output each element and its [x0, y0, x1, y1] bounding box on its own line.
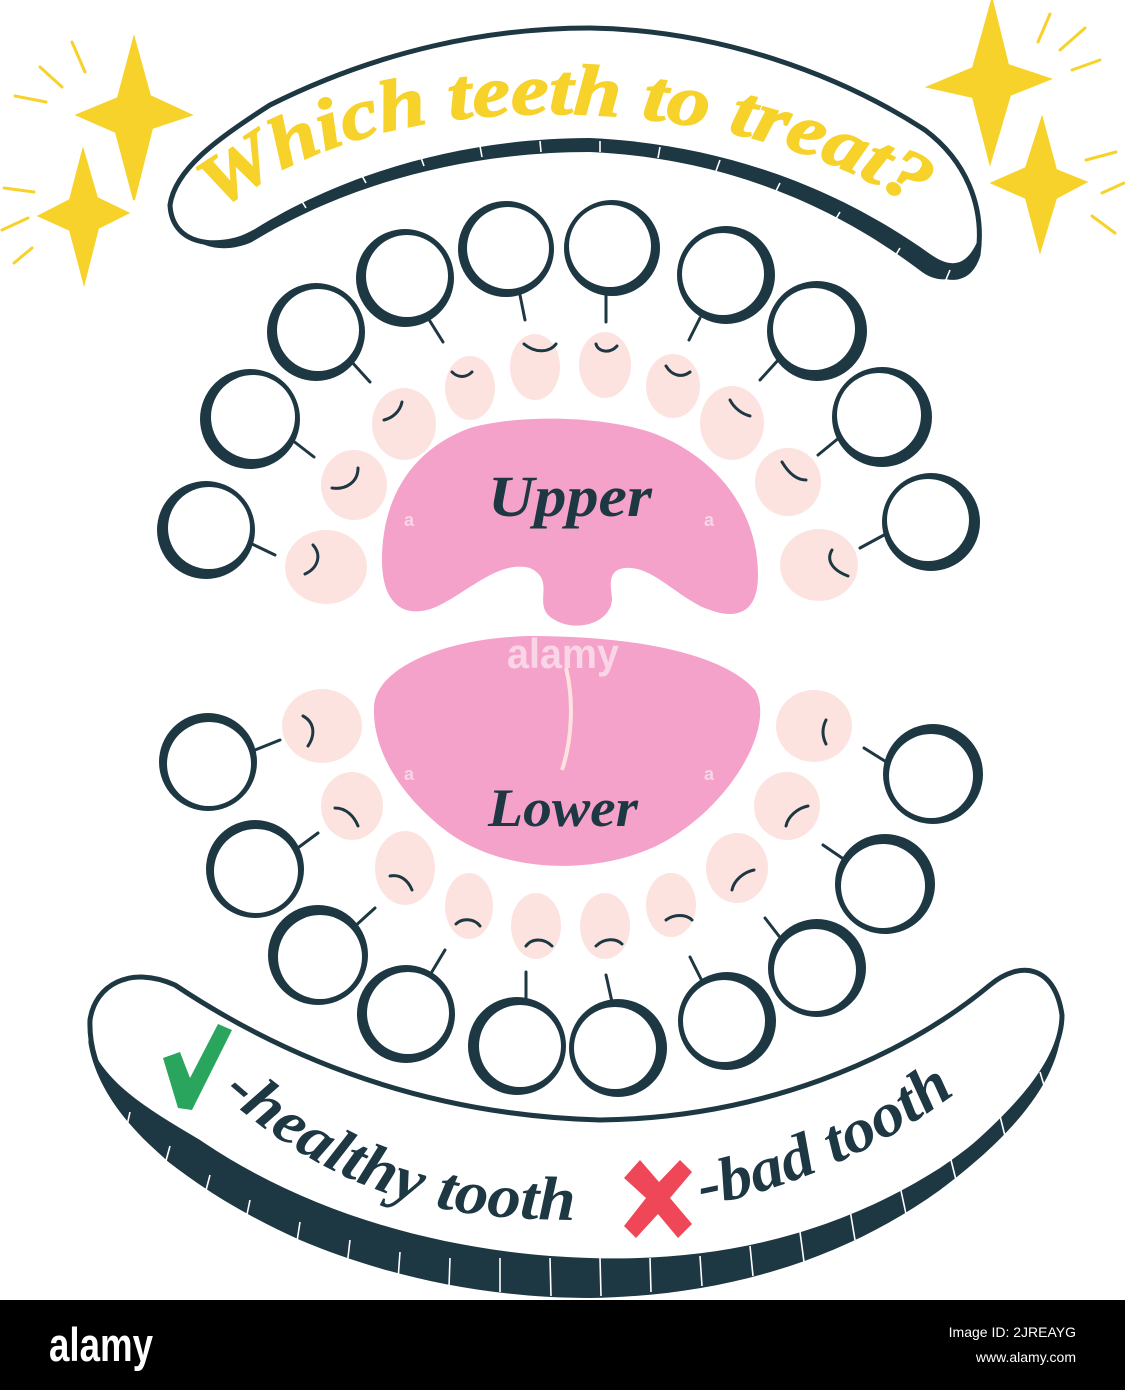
sparkle: top left: [77, 38, 191, 200]
watermark: [404, 510, 715, 784]
sparkles: [2, 0, 1124, 283]
icon: green check: [163, 1024, 232, 1110]
upper tooth circles: [157, 200, 980, 579]
sparkle: lower left: [39, 150, 128, 283]
watermark: a: [704, 764, 715, 784]
lower tooth circles: [159, 713, 983, 1097]
footer: alamy logo: alamy: [49, 1318, 153, 1371]
label: lower: Lower: [487, 778, 639, 838]
upper teeth: [285, 332, 858, 604]
sparkle: lower right: [992, 118, 1086, 251]
band hatching: bottom: [126, 1072, 1046, 1296]
sparkle rays: [2, 14, 1124, 263]
watermark: alamy: [507, 630, 620, 677]
tongue midline: [562, 668, 571, 770]
lower teeth: [282, 689, 852, 959]
watermark: a: [404, 510, 415, 530]
bottom banner: legend: [87, 968, 1064, 1298]
icon: red cross: [624, 1160, 692, 1238]
heading: which teeth to treat: Which teeth to treat?: [196, 64, 934, 202]
top banner: [168, 26, 982, 280]
palate: upper: [382, 419, 758, 626]
footer bar: [0, 1300, 1125, 1390]
legend: healthy tooth: -healthy tooth: [230, 1078, 572, 1220]
watermark: a: [704, 510, 715, 530]
label: upper: Upper: [488, 464, 652, 529]
watermark: a: [404, 764, 415, 784]
band hatching: top: [300, 141, 950, 282]
legend: bad tooth: -bad tooth: [700, 1069, 953, 1200]
footer: image id: Image ID: 2JREAYG: [949, 1324, 1076, 1340]
sparkle: top right: [928, 0, 1050, 163]
tongue: lower: [374, 636, 760, 866]
footer: site: www.alamy.com: [975, 1349, 1076, 1365]
